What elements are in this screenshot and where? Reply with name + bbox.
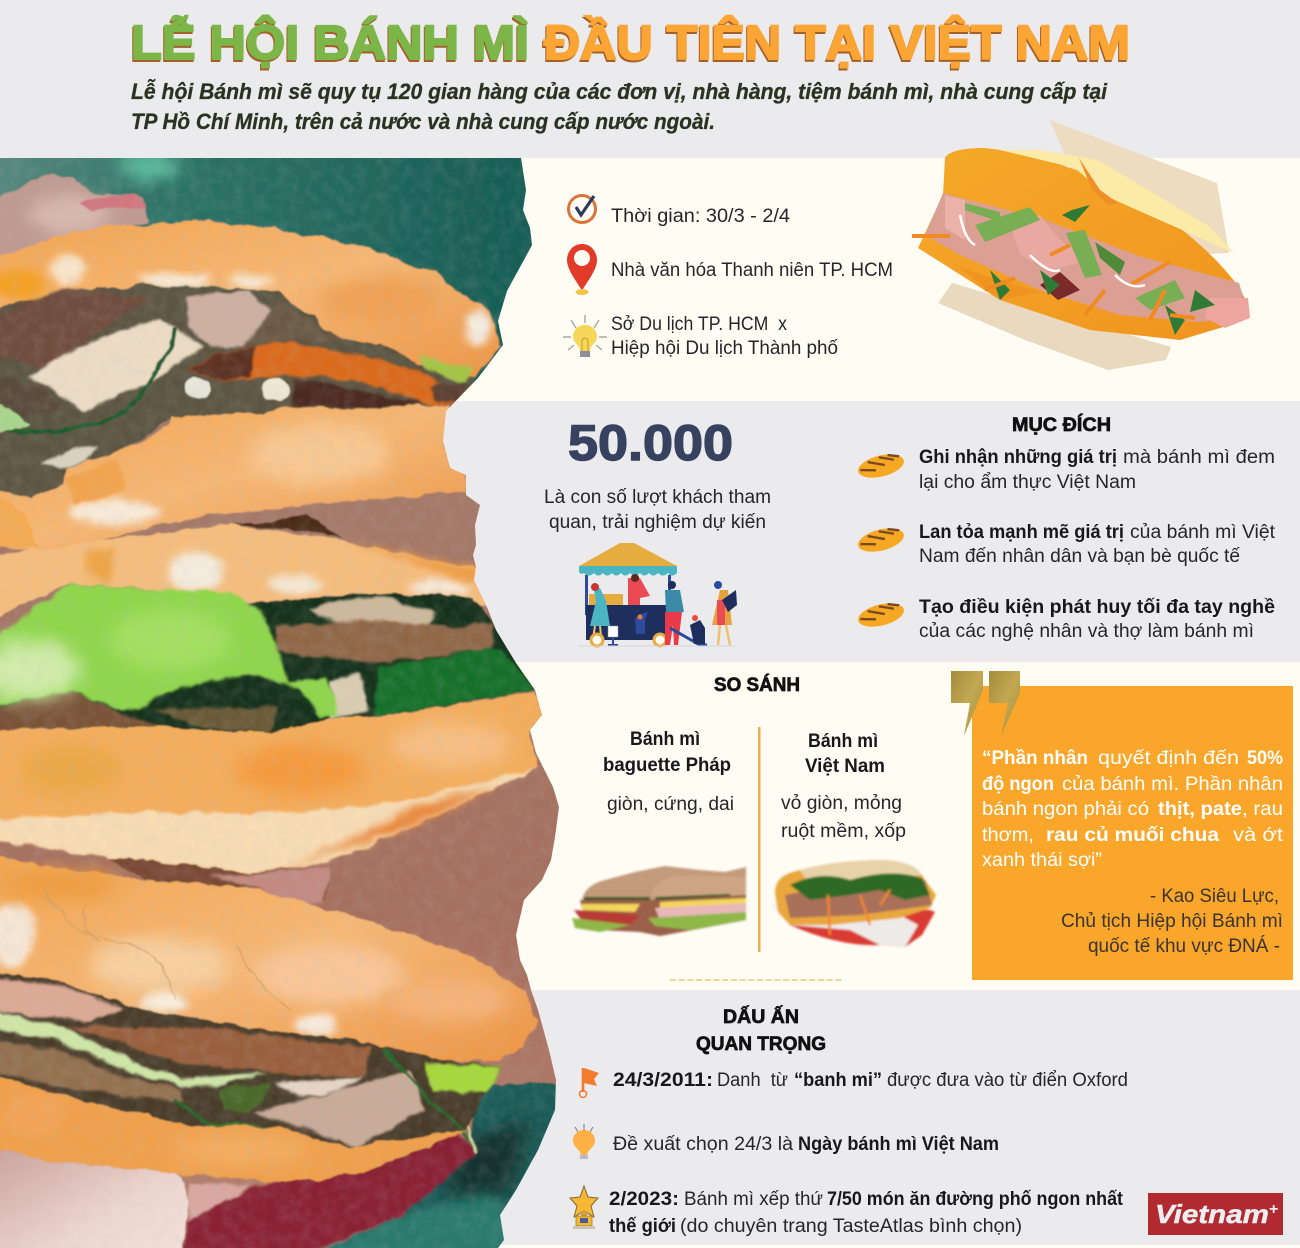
text: organisers: Sở Du lịch TP. HCM x [611, 314, 787, 335]
photo grain overlay [0, 158, 570, 1248]
sandwich 2 filling [0, 593, 535, 733]
illustration: banh mi on paper [912, 120, 1250, 370]
text: milestone 1: được đưa vào từ điển Oxford [887, 1070, 1128, 1091]
sandwich 1 top bun [0, 221, 502, 378]
text: purpose 1: lại cho ẩm thực Việt Nam [919, 472, 1136, 493]
heading: DẤU ẤN QUAN TRỌNG: DẤU ẤN [723, 1006, 799, 1028]
text: milestone 3: thế giới [609, 1216, 676, 1237]
image: baguette sandwich [572, 866, 746, 936]
text: purpose 3 [919, 597, 1275, 642]
title: ĐẦU TIÊN TẠI VIỆT NAM [544, 15, 1130, 70]
text: quote: 50% [1247, 748, 1283, 769]
heading: DẤU ẤN QUAN TRỌNG: QUAN TRỌNG [696, 1034, 826, 1055]
big number 50.000: 50.000 [568, 415, 733, 471]
text: organisers: Hiệp hội Du lịch Thành phố [611, 338, 838, 359]
text: French baguette column [603, 729, 734, 815]
text: Vietnamese banh mi column: Việt Nam [805, 756, 885, 777]
lower finger behind bun [109, 857, 331, 905]
logo: Vietnam+: + [1269, 1201, 1278, 1218]
text: milestone 3: 2/2023: [609, 1189, 679, 1210]
sandwich 1 bottom bun [0, 405, 466, 551]
text: milestone 1 [613, 1070, 1128, 1091]
text: purpose 1: Ghi nhận những giá trị [919, 447, 1117, 468]
text: quote: “Phần nhân [982, 748, 1088, 769]
icon: market stall with people [578, 543, 737, 646]
photo: three stacked banh mi held in hands [0, 150, 580, 1248]
text: milestone 3 [609, 1189, 1124, 1237]
text: quote: thịt, pate [1158, 799, 1242, 820]
icon: small bulb [573, 1124, 595, 1159]
icon: star trophy [570, 1186, 598, 1229]
text: milestone 3: 7/50 món ăn đường phố ngon nhất [827, 1189, 1124, 1210]
heading: DẤU ẤN QUAN TRỌNG [696, 1006, 826, 1055]
text: French baguette column: Bánh mì [630, 729, 700, 750]
text: milestone 1: Danh từ [717, 1070, 788, 1091]
text: visitor note [544, 487, 771, 533]
panel: visitor number [544, 415, 771, 646]
text: French baguette column: baguette Pháp [603, 755, 731, 776]
text: purpose 2 [919, 522, 1276, 567]
logo: Vietnam+ [1148, 1193, 1283, 1235]
sandwich 3 top bun [0, 853, 538, 1062]
divider: dashed line [670, 979, 843, 981]
text: visitor note: quan, trải nghiệm dự kiến [549, 512, 766, 533]
title: LỄ HỘI BÁNH MÌ [131, 15, 529, 70]
heading: SO SÁNH: SO SÁNH [714, 674, 800, 696]
text: quote: quyết định đến [1098, 748, 1239, 769]
image: Vietnamese banh mi [772, 860, 936, 947]
text: purpose 3: của các nghệ nhân và thợ làm bánh mì [919, 621, 1254, 642]
lower hand [0, 1147, 190, 1248]
icon: gold quotation marks [951, 671, 1020, 736]
logo: Vietnam+: Vietnam [1155, 1199, 1269, 1229]
text: milestone 2 [613, 1134, 999, 1155]
text: milestone 3: (do chuyên trang TasteAtlas bình chọn) [680, 1216, 1022, 1237]
icon: light bulb [563, 315, 607, 357]
text: quote: bánh ngon phải có [982, 799, 1149, 820]
sandwich 2 top bun [0, 525, 487, 620]
sandwich 2 bottom bun [0, 692, 542, 872]
text: milestone 2: Ngày bánh mì Việt Nam [798, 1134, 999, 1155]
text: quote: thơm, [982, 825, 1034, 846]
text: venue: Nhà văn hóa Thanh niên TP. HCM [611, 260, 893, 281]
text: time: Thời gian: 30/3 - 2/4 [611, 206, 790, 227]
subtitle [131, 79, 1108, 134]
upper hand [0, 175, 148, 258]
panel: event info [563, 196, 893, 359]
divider: orange vertical line [758, 727, 760, 952]
text: milestone 1: “banh mi” [794, 1070, 882, 1091]
text: purpose 2: Nam đến nhân dân và bạn bè quốc tế [919, 546, 1240, 567]
icon: bread 3 [856, 599, 906, 631]
icon: flag [580, 1068, 599, 1098]
lettuce [0, 583, 338, 717]
text: quote [982, 748, 1284, 871]
text: purpose 2: Lan tỏa mạnh mẽ giá trị [919, 522, 1124, 543]
text: milestone 2: Đề xuất chọn 24/3 là [613, 1134, 793, 1155]
text: purpose 2: của bánh mì Việt [1130, 522, 1276, 543]
text: purpose 1 [919, 447, 1275, 493]
text: milestone 3: Bánh mì xếp thứ [684, 1189, 823, 1210]
icon: location pin [567, 244, 597, 295]
text: Vietnamese banh mi column: ruột mềm, xốp [781, 821, 906, 842]
text: attribution [1061, 886, 1283, 957]
subtitle: Lễ hội Bánh mì sẽ quy tụ 120 gian hàng của các đơn vị, nhà hàng, tiệm bánh mì, nhà cung cấp tại [131, 79, 1108, 104]
text: quote: xanh thái sợi” [982, 850, 1102, 871]
text: visitor note: Là con số lượt khách tham [544, 487, 771, 508]
heading: MỤC ĐÍCH: MỤC ĐÍCH [1012, 414, 1111, 436]
title [131, 15, 1130, 70]
text: purpose 3: Tạo điều kiện phát huy tối đa tay nghề [919, 597, 1275, 618]
text: Vietnamese banh mi column [781, 731, 906, 842]
gap shadow between sandwiches [232, 515, 343, 538]
text: milestone 1: 24/3/2011: [613, 1070, 713, 1091]
callout: quote [951, 671, 1293, 980]
panel: milestones [570, 1006, 1128, 1237]
panel: comparison [572, 674, 936, 980]
orange quote box [972, 686, 1293, 980]
icon: clock with check [568, 196, 596, 222]
sandwich 3 filling [0, 973, 502, 1152]
text: attribution: Chủ tịch Hiệp hội Bánh mì [1061, 911, 1283, 932]
icon: bread 1 [856, 450, 906, 482]
sandwich 1 filling [0, 285, 475, 498]
text: Vietnamese banh mi column: vỏ giòn, mỏng [781, 793, 902, 814]
text: quote: của bánh mì. Phần nhân [1062, 774, 1283, 795]
text: quote: và ớt [1233, 825, 1284, 846]
text: Vietnamese banh mi column: Bánh mì [808, 731, 878, 752]
text: purpose 1: mà bánh mì đem [1123, 447, 1275, 468]
sandwich 3 bottom bun [0, 1075, 465, 1183]
panel: purpose [856, 414, 1276, 642]
text: attribution: - Kao Siêu Lực, [1150, 886, 1279, 907]
text: French baguette column: giòn, cứng, dai [607, 794, 734, 815]
text: quote: , rau [1242, 799, 1283, 820]
text: organisers [611, 314, 838, 359]
text: attribution: quốc tế khu vực ĐNÁ - [1088, 936, 1280, 957]
text: quote: độ ngon [982, 774, 1054, 795]
icon: bread 2 [856, 524, 906, 556]
text: quote: rau củ muối chua [1046, 825, 1219, 846]
subtitle: TP Hồ Chí Minh, trên cả nước và nhà cung cấp nước ngoài. [131, 109, 715, 134]
